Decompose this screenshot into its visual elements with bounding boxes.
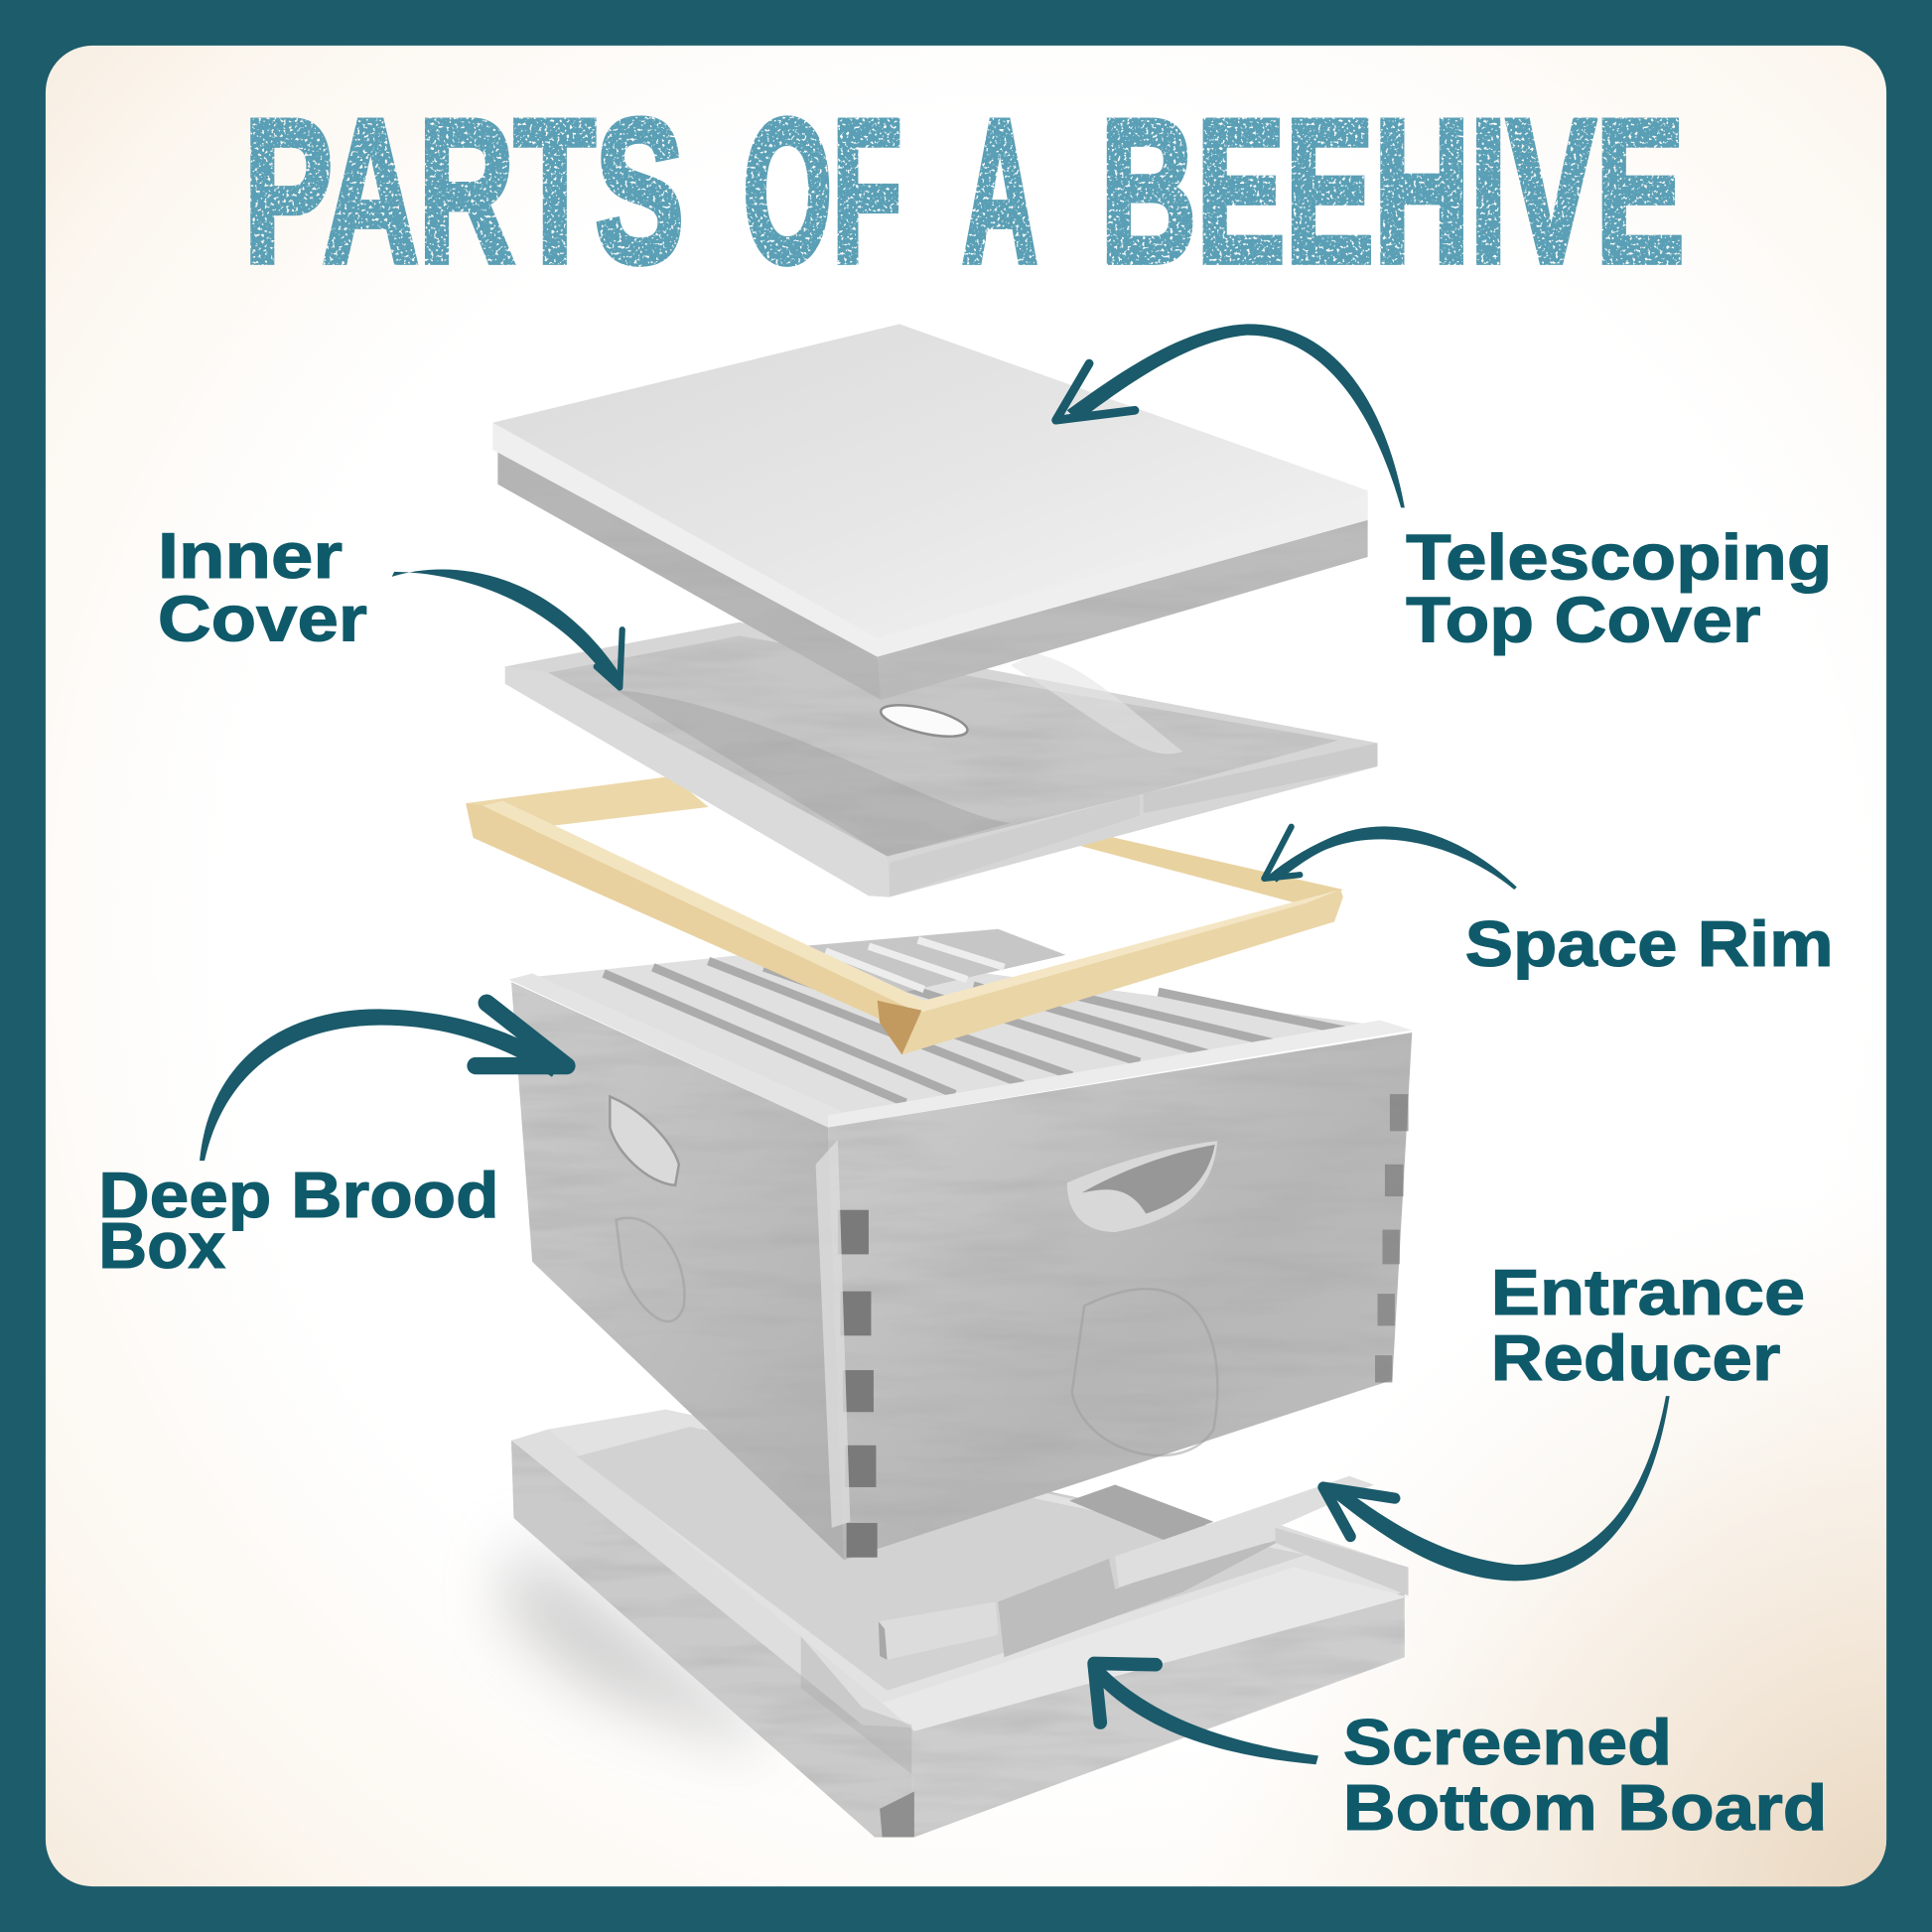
label: screened bottom board: Bottom Board <box>1343 1772 1828 1844</box>
label: entrance reducer: Reducer <box>1491 1322 1780 1394</box>
right face <box>828 1033 1412 1560</box>
arrow: screened bottom board <box>1089 1663 1318 1764</box>
label: inner cover <box>158 520 367 654</box>
arrow: space rim <box>1264 826 1517 890</box>
wood ring detail <box>617 1218 1217 1455</box>
bottom board shadow <box>505 1540 776 1743</box>
right handle <box>1067 1141 1217 1232</box>
left face <box>511 982 844 1560</box>
title: PARTS <box>244 78 684 305</box>
label: inner cover: Cover <box>158 583 367 654</box>
label: inner cover: Inner <box>158 520 343 592</box>
label: deep brood box: Box <box>98 1210 225 1282</box>
arrow: deep brood box <box>200 1003 567 1161</box>
plywood <box>548 635 1338 857</box>
label: deep brood box <box>98 1160 499 1282</box>
label: entrance reducer <box>1491 1257 1805 1394</box>
inner cover <box>505 622 1378 897</box>
wire screen <box>577 1427 1307 1691</box>
label: entrance reducer: Entrance <box>1491 1257 1805 1328</box>
arrow: inner cover <box>392 569 622 688</box>
landing board <box>883 1568 1407 1731</box>
telescoping top cover <box>492 324 1368 700</box>
space rim: front bars <box>466 801 1343 1054</box>
label: screened bottom board: Screened <box>1343 1707 1672 1778</box>
space rim: back bars <box>466 776 1343 905</box>
label: telescoping top cover <box>1406 521 1832 656</box>
title: A <box>962 78 1037 305</box>
box top with frames <box>509 929 1412 1128</box>
label: telescoping top cover: Top Cover <box>1406 585 1760 656</box>
title: OF <box>743 78 901 305</box>
title <box>244 78 1685 305</box>
deep brood box <box>509 929 1412 1560</box>
label: screened bottom board <box>1343 1707 1828 1844</box>
vent hole <box>878 699 970 743</box>
screened bottom board <box>511 1410 1409 1837</box>
inner frames seen through the rim <box>801 929 1066 992</box>
label: space rim: Space Rim <box>1465 908 1834 980</box>
entrance reducer <box>879 1476 1409 1660</box>
arrow: entrance reducer <box>1323 1396 1670 1581</box>
label: telescoping top cover: Telescoping <box>1406 521 1832 593</box>
finger joints <box>838 1094 1409 1558</box>
arrow: telescoping top cover <box>1056 324 1405 507</box>
left handle <box>610 1097 679 1185</box>
label: deep brood box: Deep Brood <box>98 1160 499 1231</box>
